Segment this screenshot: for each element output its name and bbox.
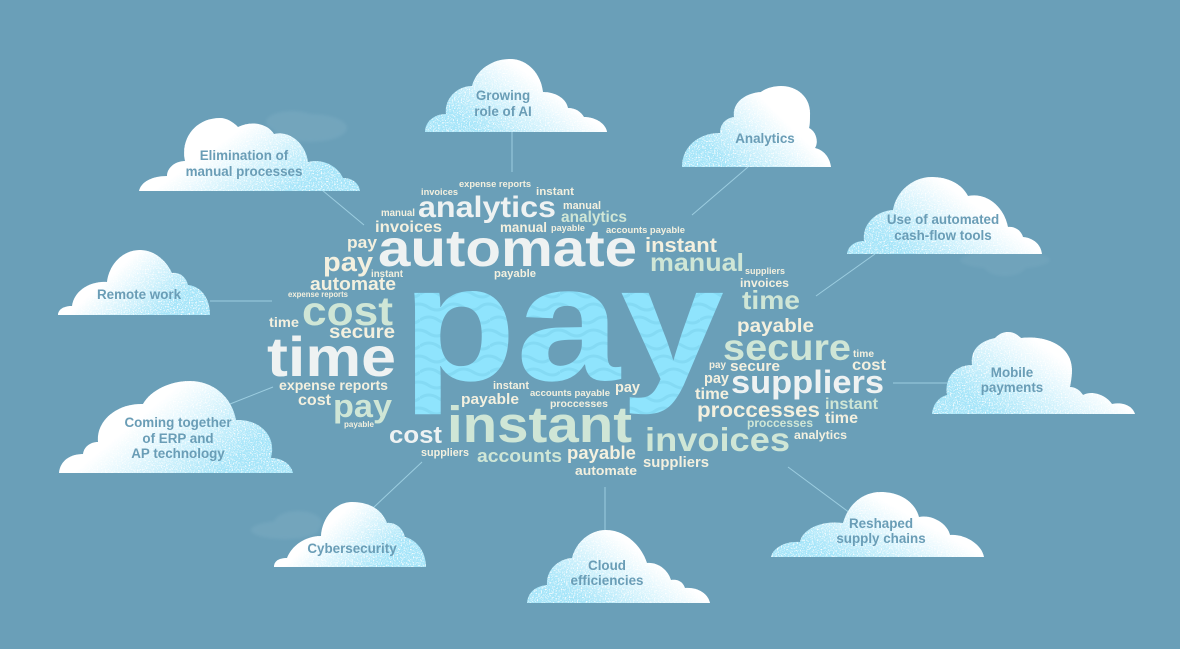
word: payable: payable xyxy=(461,391,519,408)
word: instant (large): instant xyxy=(447,396,632,453)
word: cost: cost xyxy=(298,392,331,409)
connector: analytics xyxy=(692,167,748,215)
word: accounts: accounts xyxy=(477,445,562,466)
word: pay (cream): pay xyxy=(323,247,373,277)
word: time (large): time xyxy=(267,325,396,388)
word: instant: instant xyxy=(371,269,404,280)
cloud: cloud efficiencies xyxy=(527,530,710,603)
connector: AI xyxy=(511,132,513,172)
word: suppliers (large): suppliers xyxy=(731,364,884,400)
word: time: time xyxy=(695,386,729,403)
cloud: reshaped supply chains xyxy=(771,492,984,557)
word: analytics (green): analytics xyxy=(561,209,627,226)
cloud: elimination of manual processes xyxy=(139,118,360,191)
cloud label: Coming together xyxy=(124,415,232,430)
connector: manual processes xyxy=(322,190,364,225)
word: instant (green): instant xyxy=(825,396,878,413)
word cloud xyxy=(267,179,887,478)
cloud label: Use of automated xyxy=(887,212,999,227)
cloud label: cash-flow tools xyxy=(894,228,992,243)
word: manual: manual xyxy=(563,200,601,212)
word: invoices: invoices xyxy=(421,187,458,197)
word: secure (large): secure xyxy=(723,327,851,368)
cloud label: manual processes xyxy=(186,164,302,179)
cloud label: Growing xyxy=(476,88,530,103)
word: instant: instant xyxy=(645,234,717,257)
word: pay: pay xyxy=(709,360,726,371)
cloud label: payments xyxy=(981,380,1043,395)
cloud label: Mobile xyxy=(991,365,1033,380)
word: cost (green): cost xyxy=(302,288,393,334)
connector: mobile payments xyxy=(893,382,947,384)
word: time: time xyxy=(269,314,299,330)
ghost cloud: behind cash-flow cloud xyxy=(960,251,1050,276)
word: accounts payable: accounts payable xyxy=(606,224,685,235)
word: instant: instant xyxy=(536,186,574,198)
cloud: coming together of ERP and AP technology xyxy=(59,381,293,473)
connector: supply chains xyxy=(788,467,850,513)
cloud: mobile payments xyxy=(932,332,1135,414)
word: cost: cost xyxy=(389,422,442,449)
connector: remote work xyxy=(210,300,272,302)
ghost cloud: behind elimination cloud xyxy=(266,111,347,142)
word: suppliers: suppliers xyxy=(745,266,785,276)
word: analytics: analytics xyxy=(794,428,847,442)
cloud label: efficiencies xyxy=(571,573,643,588)
cloud label: AP technology xyxy=(131,446,225,461)
word: expense reports: expense reports xyxy=(288,290,349,299)
word: time: time xyxy=(825,410,858,427)
cloud label: of ERP and xyxy=(142,431,214,446)
word: pay: pay xyxy=(704,371,729,387)
connector: cloud efficiencies xyxy=(604,487,606,531)
cloud: cybersecurity xyxy=(274,502,426,567)
word: cost: cost xyxy=(852,357,887,374)
cloud: remote work xyxy=(58,250,210,315)
word: pay (green): pay xyxy=(333,388,392,424)
ghost cloud: behind cybersecurity cloud xyxy=(251,511,322,539)
word: invoices: invoices xyxy=(375,219,442,236)
word: time (green): time xyxy=(742,285,800,315)
cloud: use of automated cash-flow tools xyxy=(847,177,1042,254)
word: suppliers: suppliers xyxy=(421,447,469,459)
word: manual: manual xyxy=(381,208,415,219)
cloud label: Analytics xyxy=(735,131,795,146)
connector: cybersecurity xyxy=(373,462,422,508)
word: expense reports: expense reports xyxy=(459,179,531,189)
word: pay (largest): pay xyxy=(402,231,724,415)
cloud label: Cybersecurity xyxy=(307,541,397,556)
word: expense reports: expense reports xyxy=(279,377,388,393)
word: payable: payable xyxy=(567,443,636,463)
word: proccesses: proccesses xyxy=(697,399,820,422)
cloud: analytics xyxy=(682,86,831,167)
word: proccesses (green): proccesses xyxy=(747,416,813,430)
word: manual (green): manual xyxy=(650,249,744,277)
word: automate: automate xyxy=(378,220,637,278)
cloud label: supply chains xyxy=(836,531,926,546)
word: automate: automate xyxy=(310,273,396,294)
word: suppliers: suppliers xyxy=(643,455,709,471)
word: automate: automate xyxy=(575,463,637,478)
word: invoices: invoices xyxy=(740,276,789,290)
word: payable: payable xyxy=(494,268,536,280)
word: secure: secure xyxy=(329,322,395,343)
cloud label: Cloud xyxy=(588,558,626,573)
word: invoices (large): invoices xyxy=(645,421,790,458)
word: proccesses: proccesses xyxy=(550,398,608,410)
cloud label: Remote work xyxy=(97,287,182,302)
connector: cash-flow tools xyxy=(816,254,875,296)
cloud label: Elimination of xyxy=(200,148,289,163)
word: time: time xyxy=(853,349,874,360)
word: manual: manual xyxy=(500,220,547,235)
word: payable: payable xyxy=(344,420,375,429)
cloud: growing role of AI xyxy=(425,59,607,132)
cloud label: Reshaped xyxy=(849,516,913,531)
word: accounts payable: accounts payable xyxy=(530,388,610,399)
word: analytics: analytics xyxy=(418,191,556,224)
connector: ERP and AP xyxy=(230,387,273,404)
word: pay: pay xyxy=(347,233,378,252)
cloud label: role of AI xyxy=(474,104,532,119)
word: instant: instant xyxy=(493,380,529,392)
word: pay: pay xyxy=(615,380,640,396)
word: payable: payable xyxy=(737,315,814,337)
word: payable: payable xyxy=(551,223,585,233)
word: secure: secure xyxy=(730,358,780,375)
